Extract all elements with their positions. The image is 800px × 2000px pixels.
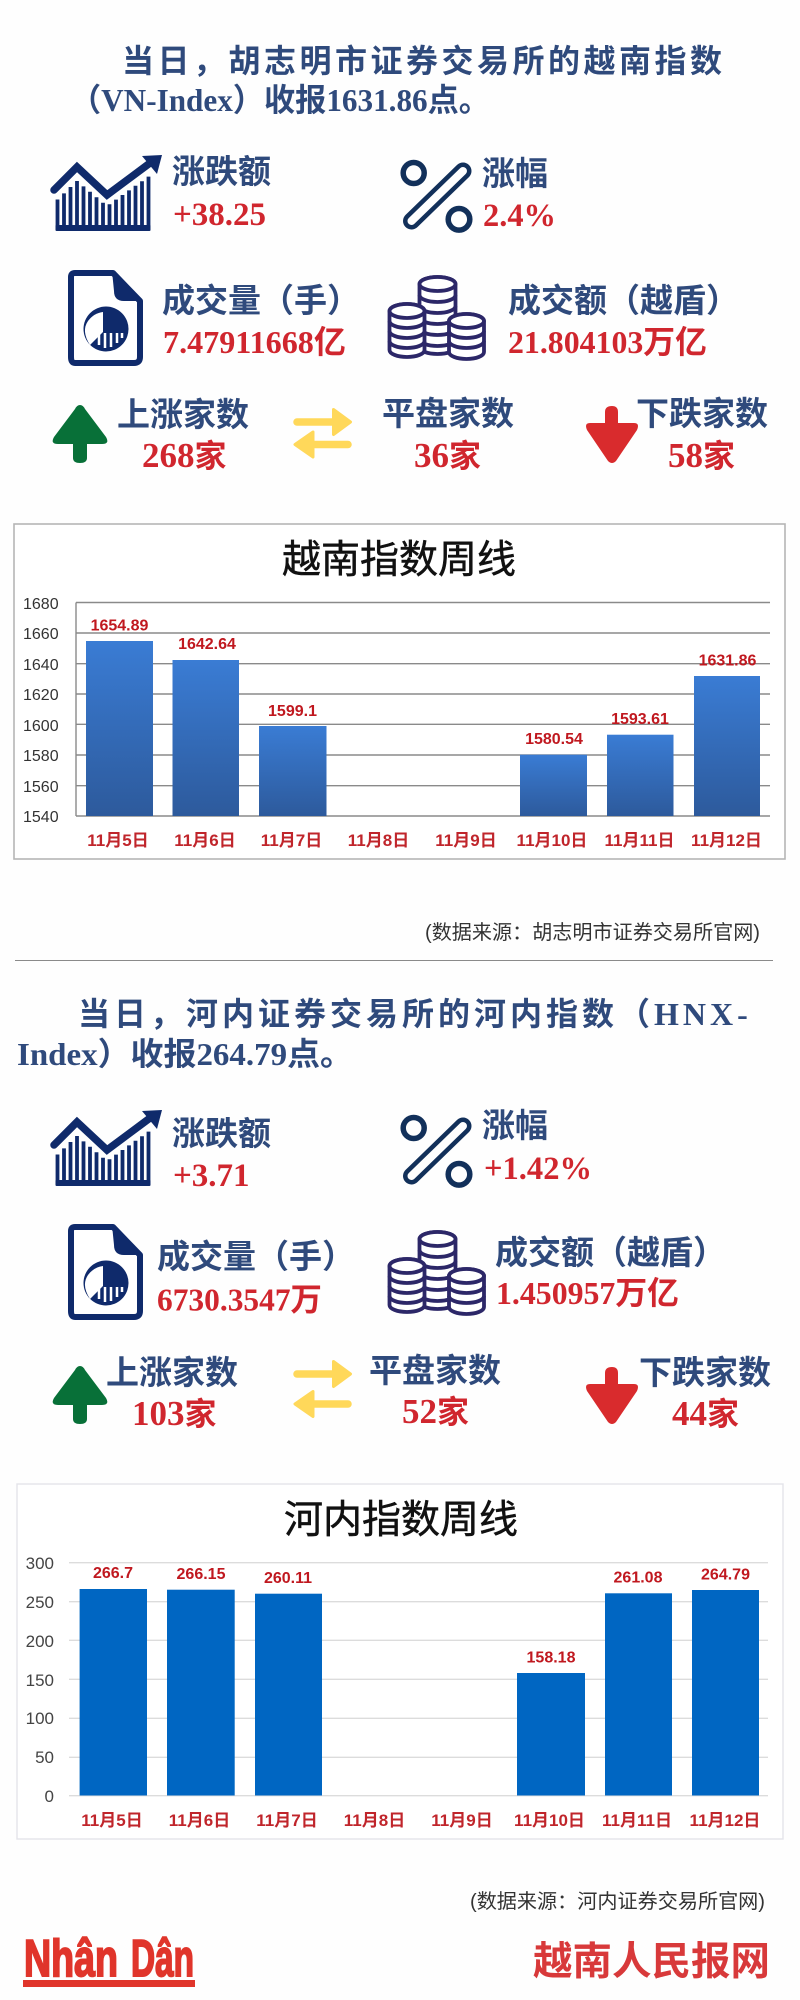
metric: declining stocks: 58家 — [668, 436, 735, 475]
metric: trading volume: 成交量（手） — [162, 274, 360, 322]
metric: advancing stocks: 上涨家数 — [106, 1346, 238, 1394]
metric: trading value — [390, 1226, 726, 1314]
chart panel: VN-Index weekly: 1660 — [23, 626, 59, 643]
metric: advancing stocks — [53, 388, 249, 475]
chart panel: VN-Index weekly — [14, 524, 785, 859]
metric: declining stocks — [586, 1346, 771, 1433]
metric: change amount: +38.25 — [173, 197, 266, 233]
chart panel: HNX-Index weekly: 11月12日 — [690, 1811, 760, 1830]
chart panel: VN-Index weekly: 11月9日 — [435, 831, 497, 850]
chart panel: HNX-Index weekly: 266.15 — [177, 1566, 226, 1583]
chart panel: HNX-Index weekly: 11月6日 — [169, 1811, 230, 1830]
metric: advancing stocks — [53, 1346, 238, 1433]
logo: Nhan Dan: Dân — [131, 1930, 194, 1988]
footer: site name: 越南人民报网 — [533, 1930, 770, 1987]
metric: declining stocks — [586, 387, 768, 475]
metric: unchanged stocks: 平盘家数 — [369, 1344, 501, 1392]
title: HNX-Index summary: Index）收报264.79点。 — [17, 1036, 353, 1072]
chart panel: HNX-Index weekly: 261.08 — [614, 1570, 663, 1587]
icon: red down arrow — [586, 1367, 638, 1424]
icon: coin stacks — [390, 1232, 484, 1314]
title: HNX-Index summary — [17, 996, 752, 1072]
icon: yellow exchange arrows — [295, 410, 350, 457]
icon: coin stacks — [390, 277, 484, 359]
source note: VN-Index: (数据来源：胡志明市证券交易所官网) — [425, 921, 760, 944]
chart panel: VN-Index weekly: 1642.64 — [178, 636, 236, 653]
chart panel: VN-Index weekly: 越南指数周线 — [282, 529, 516, 585]
icon: trend chart — [54, 155, 162, 231]
chart panel: VN-Index weekly: 11月8日 — [348, 831, 409, 850]
chart panel: VN-Index weekly: 1654.89 — [91, 618, 149, 634]
metric: unchanged stocks — [295, 1344, 501, 1431]
metric: trading value: 成交额（越盾） — [495, 1226, 726, 1274]
chart panel: HNX-Index weekly: 158.18 — [527, 1650, 576, 1667]
chart panel: VN-Index weekly: 1600 — [23, 718, 59, 735]
icon: trend chart — [54, 1110, 162, 1186]
chart panel: HNX-Index weekly: 11月11日 — [602, 1811, 672, 1830]
chart panel: HNX-Index weekly: 11月9日 — [431, 1811, 493, 1830]
chart panel: VN-Index weekly: 1540 — [23, 809, 59, 826]
metric: unchanged stocks: 52家 — [402, 1392, 469, 1431]
title: VN-Index summary: （VN-Index）收报1631.86点。 — [70, 82, 490, 118]
metric: trading volume: 7.47911668亿 — [163, 324, 346, 360]
chart panel: VN-Index weekly: 11月7日 — [261, 831, 322, 850]
metric: change amount: 涨跌额 — [172, 145, 271, 193]
metric: change percent: 2.4% — [483, 198, 556, 234]
icon: percent — [403, 1118, 470, 1185]
chart panel: HNX-Index weekly: 11月8日 — [344, 1811, 405, 1830]
chart panel: HNX-Index weekly: 264.79 — [701, 1567, 750, 1584]
chart panel: VN-Index weekly: 1560 — [23, 779, 59, 796]
metric: change percent — [403, 147, 556, 234]
metric: trading volume: 6730.3547万 — [157, 1282, 322, 1318]
chart panel: VN-Index weekly: 11月12日 — [691, 831, 762, 850]
chart panel: HNX-Index weekly: 266.7 — [93, 1565, 133, 1582]
chart panel: VN-Index weekly: 1640 — [23, 657, 59, 674]
chart panel: VN-Index weekly: 1620 — [23, 687, 59, 704]
metric: advancing stocks: 103家 — [132, 1394, 217, 1433]
title: VN-Index summary: 当日，胡志明市证券交易所的越南指数 — [122, 43, 726, 79]
metric: unchanged stocks: 36家 — [414, 436, 481, 475]
icon: green up arrow — [53, 405, 107, 463]
icon: percent — [403, 162, 470, 230]
metric: trading value — [390, 274, 739, 360]
chart panel: HNX-Index weekly: 250 — [26, 1593, 54, 1612]
metric: change percent: 涨幅 — [482, 147, 548, 195]
metric: trading value: 成交额（越盾） — [508, 274, 739, 322]
chart panel: HNX-Index weekly: 300 — [26, 1554, 54, 1573]
chart panel: VN-Index weekly: 1593.61 — [611, 711, 669, 728]
chart panel: VN-Index weekly: 11月6日 — [174, 831, 236, 850]
metric: unchanged stocks: 平盘家数 — [382, 387, 514, 435]
chart panel: HNX-Index weekly: 11月7日 — [256, 1811, 318, 1830]
chart panel: VN-Index weekly: 1680 — [23, 596, 59, 613]
chart panel: VN-Index weekly: 1580.54 — [525, 731, 583, 748]
chart panel: VN-Index weekly: 1599.1 — [268, 703, 317, 720]
metric: declining stocks: 44家 — [672, 1394, 739, 1433]
logo: Nhan Dan: Nhân — [24, 1930, 118, 1988]
chart panel: HNX-Index weekly: 260.11 — [264, 1570, 312, 1587]
metric: unchanged stocks — [295, 387, 514, 475]
icon: document with pie chart — [71, 1225, 143, 1317]
metric: advancing stocks: 上涨家数 — [117, 388, 249, 436]
metric: change amount: +3.71 — [173, 1158, 250, 1194]
metric: trading value: 21.804103万亿 — [508, 324, 707, 360]
metric: change percent: +1.42% — [484, 1151, 592, 1187]
metric: declining stocks: 下跌家数 — [636, 387, 768, 435]
chart panel: VN-Index weekly: 11月10日 — [517, 831, 587, 850]
chart panel: HNX-Index weekly: 0 — [45, 1787, 54, 1806]
icon: document with pie chart — [71, 271, 143, 363]
metric: change amount: 涨跌额 — [172, 1107, 271, 1155]
chart panel: HNX-Index weekly: 150 — [26, 1671, 54, 1690]
chart panel: VN-Index weekly: 11月11日 — [605, 831, 674, 850]
icon: yellow arrows — [295, 1362, 350, 1416]
chart panel: HNX-Index weekly: 100 — [26, 1709, 54, 1728]
chart panel: VN-Index weekly: 1580 — [23, 748, 59, 765]
chart panel: HNX-Index weekly: 11月10日 — [514, 1811, 585, 1830]
metric: trading value: 1.450957万亿 — [496, 1275, 679, 1311]
icon: green up arrow — [53, 1366, 107, 1424]
metric: trading volume — [71, 1225, 355, 1318]
chart panel: HNX-Index weekly — [17, 1484, 783, 1839]
metric: trading volume — [71, 271, 360, 363]
metric: trading volume: 成交量（手） — [157, 1230, 355, 1278]
chart panel: VN-Index weekly: 11月5日 — [87, 831, 149, 850]
chart panel: VN-Index weekly: 1631.86 — [699, 652, 757, 670]
metric: declining stocks: 下跌家数 — [639, 1346, 771, 1394]
chart panel: HNX-Index weekly: 200 — [26, 1632, 54, 1651]
icon: red down arrow — [586, 406, 638, 463]
metric: change percent — [403, 1099, 592, 1187]
metric: change percent: 涨幅 — [482, 1099, 548, 1147]
source note: HNX-Index: (数据来源：河内证券交易所官网) — [470, 1890, 765, 1913]
metric: advancing stocks: 268家 — [142, 436, 227, 475]
chart panel: HNX-Index weekly: 11月5日 — [81, 1811, 143, 1830]
title: HNX-Index summary: 当日，河内证券交易所的河内指数（HNX- — [78, 996, 752, 1032]
chart panel: HNX-Index weekly: 河内指数周线 — [284, 1489, 518, 1545]
chart panel: HNX-Index weekly: 50 — [35, 1748, 54, 1767]
title: VN-Index summary — [70, 43, 726, 118]
metric: change amount — [54, 1107, 271, 1194]
metric: change amount — [54, 145, 271, 233]
